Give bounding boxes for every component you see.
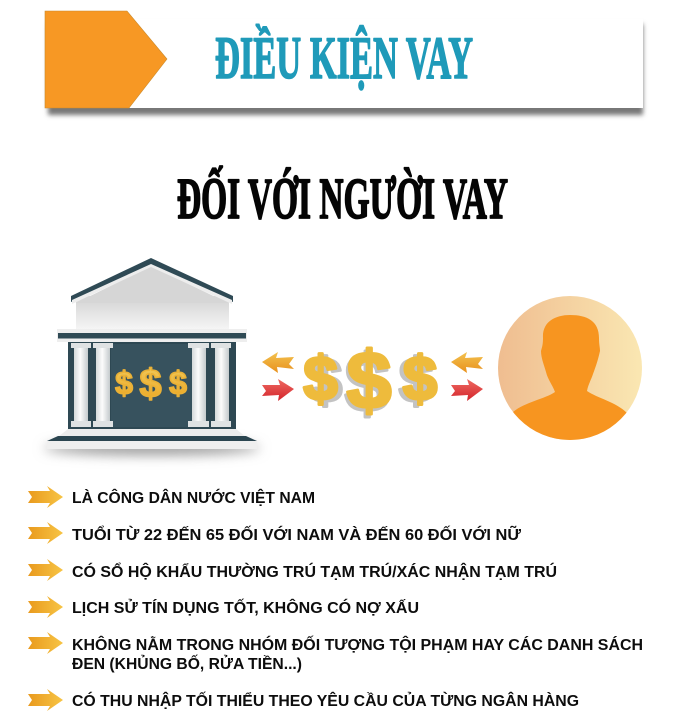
icon: arrows right of dollars	[451, 352, 483, 401]
icon: large dollar signs: $	[344, 339, 390, 429]
icon: large dollar signs	[303, 336, 437, 429]
bullet 3: CÓ SỔ HỘ KHẨU THƯỜNG TRÚ TẠM TRÚ/XÁC NHẬN TẠM TRÚ	[72, 562, 557, 581]
bank dollar signs: $	[115, 365, 133, 401]
bullet 1: LÀ CÔNG DÂN NƯỚC VIỆT NAM	[72, 488, 315, 507]
bank dollar signs	[115, 362, 187, 406]
icon: person avatar	[498, 296, 642, 445]
list: loan conditions	[28, 486, 643, 711]
bullet 5: KHÔNG NẰM TRONG NHÓM ĐỐI TƯỢNG TỘI PHẠM HAY CÁC DANH SÁCH	[72, 634, 643, 654]
bullet 4: LỊCH SỬ TÍN DỤNG TỐT, KHÔNG CÓ NỢ XẤU	[72, 597, 419, 617]
bank dollar signs: $	[169, 365, 187, 401]
bullet 2: TUỔI TỪ 22 ĐẾN 65 ĐỐI VỚI NAM VÀ ĐẾN 60 ĐỐI VỚI NỮ	[72, 524, 522, 544]
icon: orange arrow tab	[45, 11, 167, 108]
banner	[45, 11, 643, 115]
bullet 4	[28, 596, 419, 618]
icon: large dollar signs: $	[303, 345, 338, 414]
icon: large dollar signs: $	[346, 336, 392, 426]
icon: large dollar signs: $	[403, 345, 437, 414]
bullet 1	[28, 486, 315, 508]
icon: large dollar signs: $	[399, 347, 433, 416]
bullet 5	[28, 632, 643, 673]
bullet 5: ĐEN (KHỦNG BỐ, RỬA TIỀN...)	[72, 653, 302, 673]
icon: large dollar signs: $	[308, 347, 342, 416]
bank dollar signs: $	[139, 362, 162, 406]
icon: arrows left of dollars	[262, 352, 294, 401]
title: ĐIỀU KIỆN VAY	[215, 25, 473, 91]
bullet 6: CÓ THU NHẬP TỐI THIỂU THEO YÊU CẦU CỦA TỪNG NGÂN HÀNG	[72, 690, 579, 710]
bullet 2	[28, 522, 522, 544]
icon: bank building	[44, 258, 260, 455]
